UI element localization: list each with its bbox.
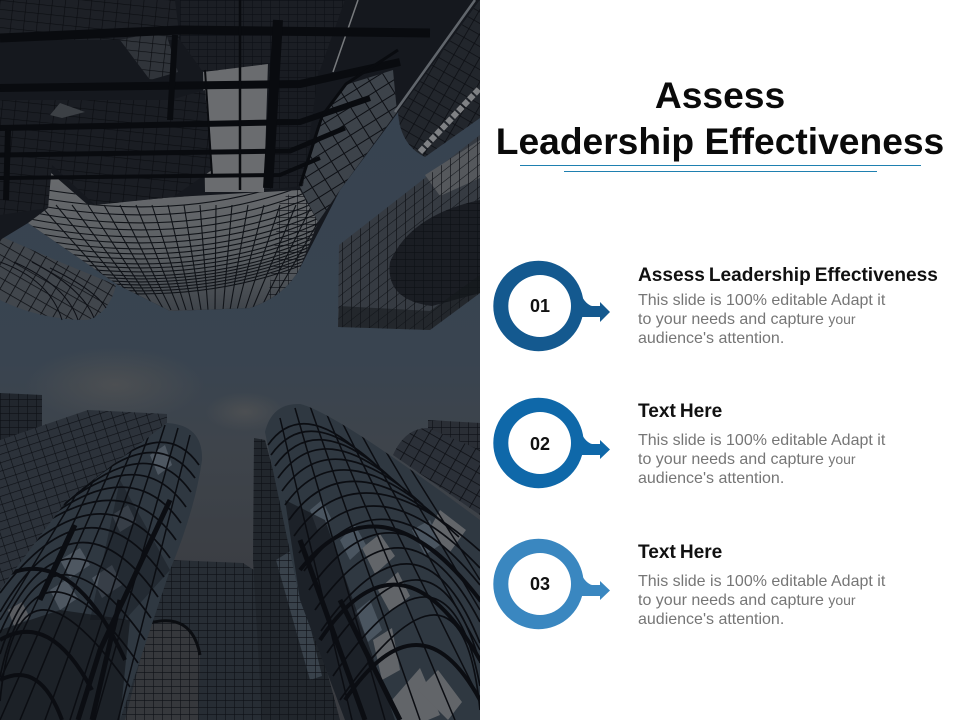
number 01: 01 xyxy=(530,296,550,316)
body text 3: audience's attention. xyxy=(638,611,784,628)
sky xyxy=(0,0,480,720)
heading 3: Text Here xyxy=(638,542,722,563)
horizontal dark beams xyxy=(0,0,430,200)
icon: ring and arrow 03 xyxy=(493,538,610,630)
body text 2: This slide is 100% editable Adapt it xyxy=(638,432,885,449)
title xyxy=(496,74,944,162)
building: lower centre block xyxy=(120,560,268,720)
blue glass strip on right face xyxy=(268,70,397,300)
building: lower left curved tower xyxy=(0,423,202,720)
icon: ring and arrow 01 xyxy=(493,260,610,352)
title underline rules xyxy=(520,165,921,172)
body text 3: to your needs and capture your xyxy=(638,592,856,609)
item 2 xyxy=(493,398,610,488)
building: narrow tower xyxy=(253,438,340,720)
heading 1: Assess Leadership Effectiveness xyxy=(638,265,938,286)
photo: skyscrapers seen from below xyxy=(0,0,480,720)
building: small block top left xyxy=(0,393,42,441)
body text 2: to your needs and capture your xyxy=(638,451,856,468)
building: far right lower cylinder xyxy=(393,420,480,515)
body text 1 xyxy=(638,292,886,347)
title: Assess xyxy=(655,74,785,116)
icon: ring and arrow 02 xyxy=(493,398,610,488)
building: upper right glass block xyxy=(338,135,480,330)
building: lower right curved tower xyxy=(265,404,480,720)
building: upper right cylinder xyxy=(395,0,480,157)
body text 1: to your needs and capture your xyxy=(638,311,856,328)
body text 1: audience's attention. xyxy=(638,330,784,347)
body text 3: This slide is 100% editable Adapt it xyxy=(638,573,885,590)
gray sky-reflecting slot xyxy=(203,62,268,192)
title: Leadership Effectiveness xyxy=(496,120,944,162)
building: lower left roof xyxy=(0,410,167,590)
building: upper left cylinder xyxy=(0,236,116,320)
number 02: 02 xyxy=(530,434,550,454)
building: central tower underside xyxy=(0,0,480,311)
item 3 xyxy=(493,538,610,630)
heading 2: Text Here xyxy=(638,401,722,422)
body text 2 xyxy=(638,432,886,487)
body text 1: This slide is 100% editable Adapt it xyxy=(638,292,885,309)
body text 2: audience's attention. xyxy=(638,470,784,487)
item 1 xyxy=(493,260,610,352)
dark reflected cylinders xyxy=(0,0,358,215)
number 03: 03 xyxy=(530,574,550,594)
body text 3 xyxy=(638,573,886,628)
lit glass face with perspective grid xyxy=(28,173,318,311)
